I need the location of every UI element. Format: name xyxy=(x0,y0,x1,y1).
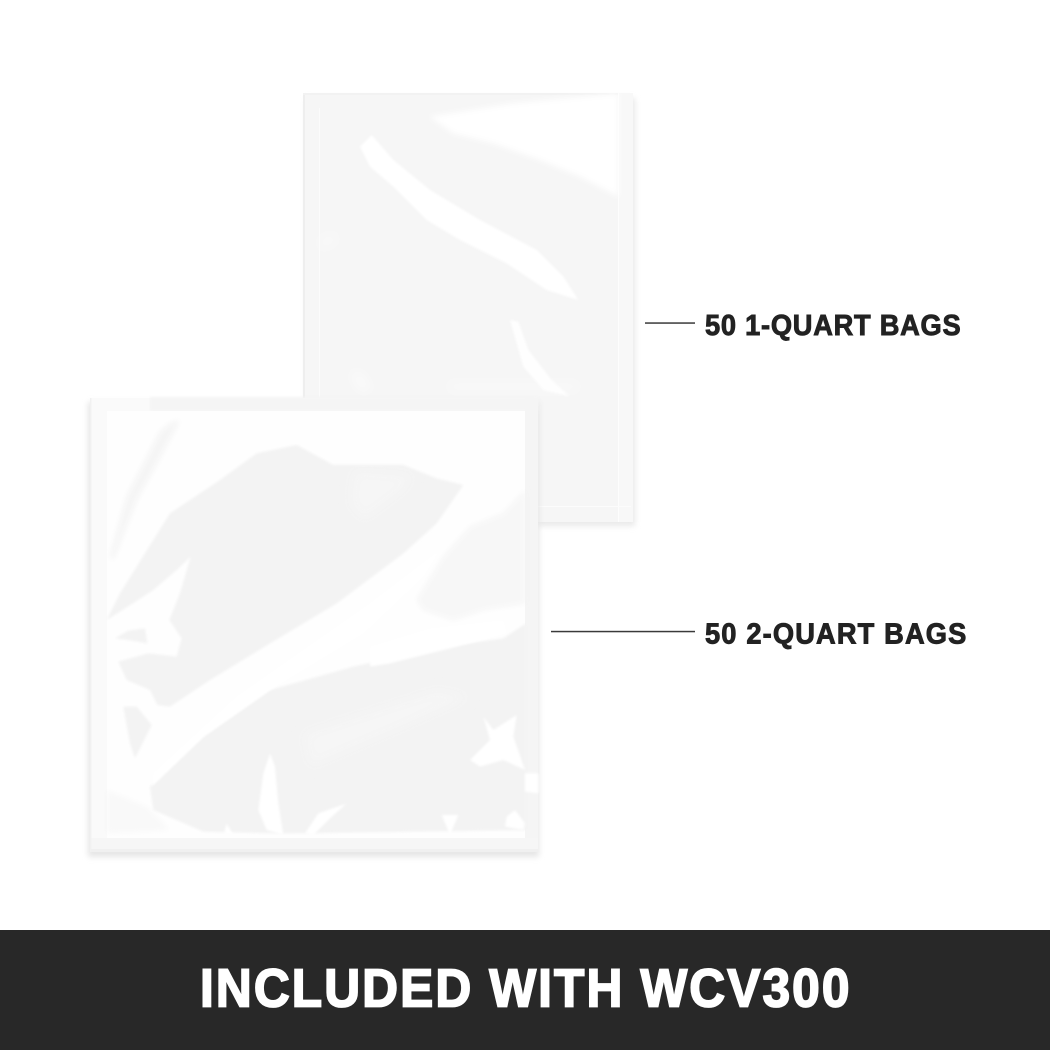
label: 50 2-quart bags: 50 2-QUART BAGS xyxy=(705,618,966,650)
label: 50 1-quart bags: 50 1-QUART BAGS xyxy=(705,309,961,341)
1-quart bag xyxy=(303,93,635,526)
folds: grey film areas xyxy=(107,445,526,833)
banner: INCLUDED WITH WCV300 xyxy=(200,958,850,1018)
banner xyxy=(0,930,1050,1050)
2-quart bag xyxy=(88,397,539,857)
highlights xyxy=(152,550,538,835)
